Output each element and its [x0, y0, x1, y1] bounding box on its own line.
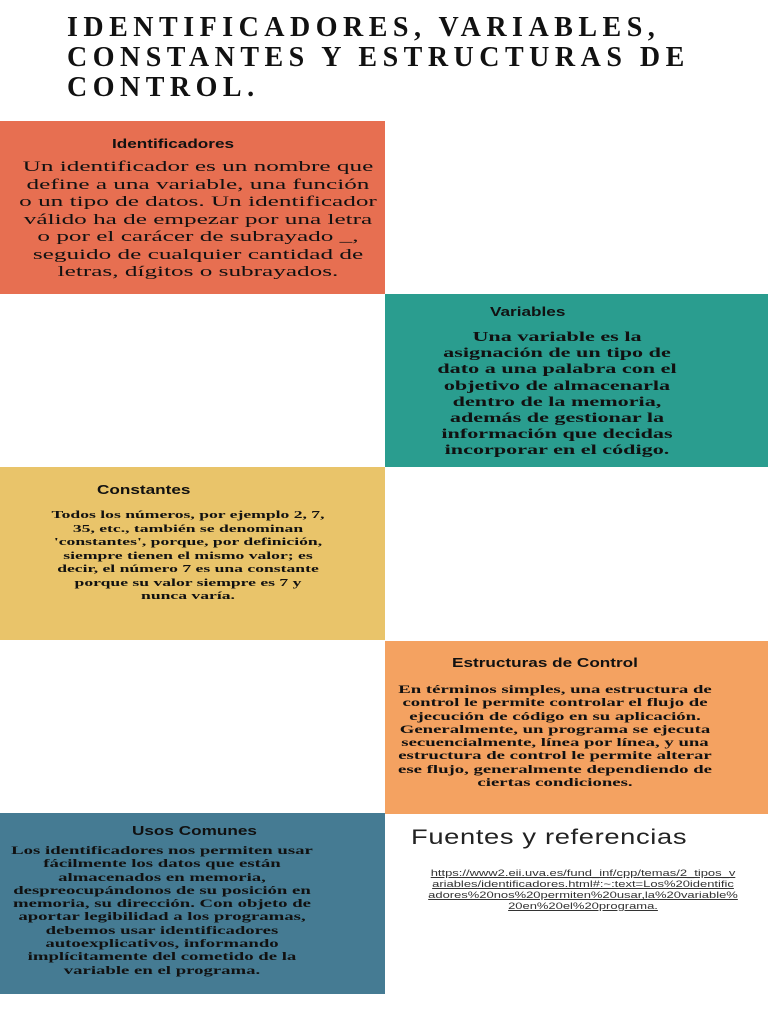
heading: usos comunes: Usos Comunes	[132, 823, 257, 838]
heading: fuentes: Fuentes y referencias	[411, 826, 687, 849]
text: variables: Una variable es la	[472, 329, 642, 344]
text: usos comunes: despreocupándonos de su posición en	[13, 885, 311, 897]
text: identificadores: o por el carácer de subrayado _,	[37, 229, 359, 245]
text: estructuras: En términos simples, una estructura de	[398, 684, 712, 696]
text: usos comunes: debemos usar identificadores	[46, 925, 278, 937]
title: CONSTANTES Y ESTRUCTURAS DE	[67, 42, 690, 73]
text: variables: incorporar en el código.	[445, 442, 669, 457]
text: variables: además de gestionar la	[450, 410, 664, 425]
text: constantes: nunca varía.	[141, 590, 235, 602]
text: usos comunes: aportar legibilidad a los programas,	[18, 911, 306, 923]
text: usos comunes	[11, 845, 313, 977]
text: variables: asignación de un tipo de	[443, 345, 671, 360]
text: estructuras	[398, 684, 712, 789]
text: usos comunes: Los identificadores nos permiten usar	[11, 845, 313, 857]
text: variables	[437, 329, 677, 457]
text: usos comunes: autoexplicativos, informando	[45, 938, 279, 950]
text: identificadores: Un identificador es un nombre que	[23, 159, 373, 175]
text: constantes: decir, el número 7 es una constante	[57, 563, 319, 575]
text: variables: objetivo de almacenarla	[444, 378, 670, 393]
text: variables: dato a una palabra con el	[437, 361, 677, 376]
text: identificadores: letras, dígitos o subrayados.	[58, 264, 338, 280]
text: estructuras: ciertas condiciones.	[477, 777, 633, 789]
text: constantes: Todos los números, por ejemplo 2, 7,	[52, 509, 324, 521]
text: link: 20en%20el%20programa.	[508, 901, 658, 911]
text: usos comunes: almacenados en memoria,	[58, 872, 266, 884]
text: constantes: 35, etc., también se denominan	[73, 522, 303, 534]
text: estructuras: control le permite controlar el flujo de	[402, 697, 708, 709]
panel: identificadores	[0, 121, 385, 294]
heading: constantes: Constantes	[97, 482, 190, 497]
text: identificadores: seguido de cualquier cantidad de	[33, 246, 363, 262]
text: constantes: 'constantes', porque, por definición,	[54, 536, 322, 548]
text: estructuras: ese flujo, generalmente dependiendo de	[398, 764, 712, 776]
text: constantes: porque su valor siempre es 7 y	[75, 576, 301, 588]
text: identificadores: define a una variable, una función	[27, 176, 369, 192]
text: link: ariables/identificadores.html#:~:text=Los%20identific	[432, 879, 734, 889]
text: usos comunes: memoria, su dirección. Con objeto de	[13, 898, 311, 910]
panel: estructuras de control	[385, 641, 768, 814]
text: identificadores	[19, 159, 377, 280]
heading: identificadores: Identificadores	[112, 136, 234, 151]
text: identificadores: válido ha de empezar por una letra	[24, 212, 372, 228]
text: estructuras: Generalmente, un programa se ejecuta	[400, 724, 710, 736]
text: identificadores: o un tipo de datos. Un identificador	[19, 194, 377, 210]
text: usos comunes: variable en el programa.	[64, 965, 260, 977]
text: variables: información que decidas	[441, 426, 673, 441]
panel: constantes	[0, 467, 385, 640]
heading: estructuras: Estructuras de Control	[452, 655, 638, 670]
title: IDENTIFICADORES, VARIABLES,	[67, 12, 660, 43]
heading: variables: Variables	[490, 304, 565, 319]
text: link: adores%20nos%20permiten%20usar,la%20variable%	[428, 890, 738, 900]
text: link	[428, 868, 738, 911]
title: CONTROL.	[67, 72, 260, 103]
text: usos comunes: fácilmente los datos que están	[43, 858, 281, 870]
title	[67, 12, 690, 103]
panel: variables	[385, 294, 768, 467]
panel: usos comunes	[0, 813, 385, 994]
text: variables: dentro de la memoria,	[453, 394, 661, 409]
text: constantes	[52, 509, 324, 602]
text: estructuras: estructura de control le permite alterar	[398, 750, 712, 762]
text: estructuras: ejecución de código en su aplicación.	[409, 711, 701, 723]
text: link: https://www2.eii.uva.es/fund_inf/cpp/temas/2_tipos_v	[431, 868, 735, 878]
text: constantes: siempre tienen el mismo valor; es	[63, 550, 313, 562]
text: estructuras: secuencialmente, línea por línea, y una	[401, 737, 709, 749]
text: usos comunes: implícitamente del cometido de la	[28, 951, 296, 963]
